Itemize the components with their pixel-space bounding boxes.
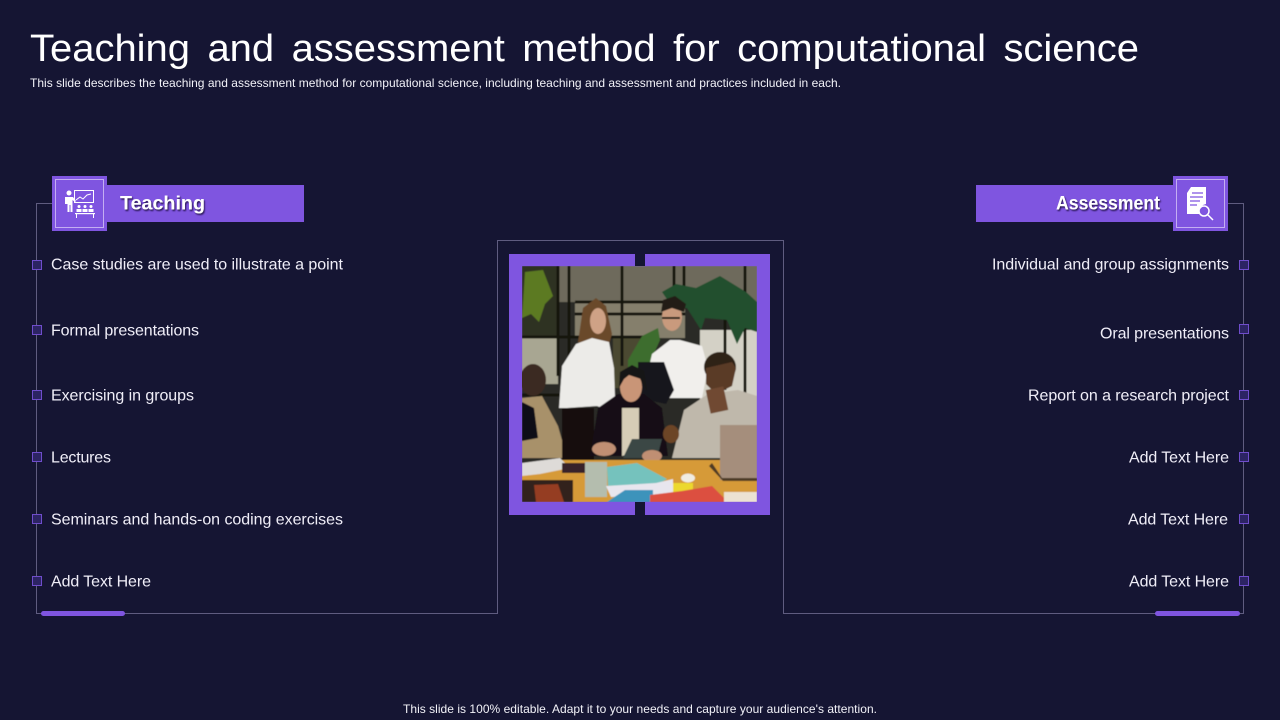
papers and items (522, 458, 570, 476)
teaching item 4: Lectures (51, 450, 111, 466)
panel: teaching (52, 176, 304, 231)
seated man right (672, 390, 757, 458)
teaching item 5: Seminars and hands-on coding exercises (51, 512, 343, 528)
title: Teaching and assessment method for computational science (30, 28, 1139, 70)
laptop (720, 425, 757, 480)
panel: assessment (976, 176, 1228, 231)
teaching item 1: Case studies are used to illustrate a point (51, 256, 344, 274)
teaching item 2: Formal presentations (51, 322, 199, 340)
assessment item 6: Add Text Here (1129, 574, 1229, 590)
photo frame (509, 254, 770, 515)
subtitle: This slide describes the teaching and assessment method for computational science, including teaching and assessment and practices included in each. (30, 76, 841, 90)
tablet held by man (638, 362, 674, 404)
tablet (623, 439, 662, 458)
assessment list (992, 256, 1248, 590)
teaching item 6: Add Text Here (51, 574, 151, 590)
photo: team around a table (520, 266, 757, 502)
plants (522, 270, 553, 322)
assessment item 2: Oral presentations (1100, 326, 1229, 342)
window frame bars (522, 266, 745, 396)
left bracket connector (36, 204, 1244, 614)
footer note: This slide is 100% editable. Adapt it to your needs and capture your audience's attention. (403, 702, 877, 716)
right accent bar (1155, 611, 1240, 616)
assessment item 5: Add Text Here (1128, 512, 1228, 528)
standing man (646, 340, 708, 398)
table (522, 460, 757, 502)
seated man left (522, 396, 567, 458)
assessment header bar (976, 185, 1174, 222)
assessment item 1: Individual and group assignments (992, 256, 1229, 274)
teaching list (32, 256, 344, 590)
assessment item 4: Add Text Here (1129, 450, 1229, 466)
teaching header bar (106, 185, 304, 222)
left accent bar (41, 611, 125, 616)
icon: teacher presenting (52, 176, 107, 231)
room (522, 301, 751, 464)
assessment item 3: Report on a research project (1028, 388, 1230, 404)
assessment heading: Assessment (1056, 194, 1161, 214)
teaching heading: Teaching (120, 194, 205, 214)
teaching item 3: Exercising in groups (51, 388, 194, 404)
icon: document with magnifier (1173, 176, 1228, 231)
standing woman (578, 298, 612, 344)
seated woman (590, 394, 668, 456)
